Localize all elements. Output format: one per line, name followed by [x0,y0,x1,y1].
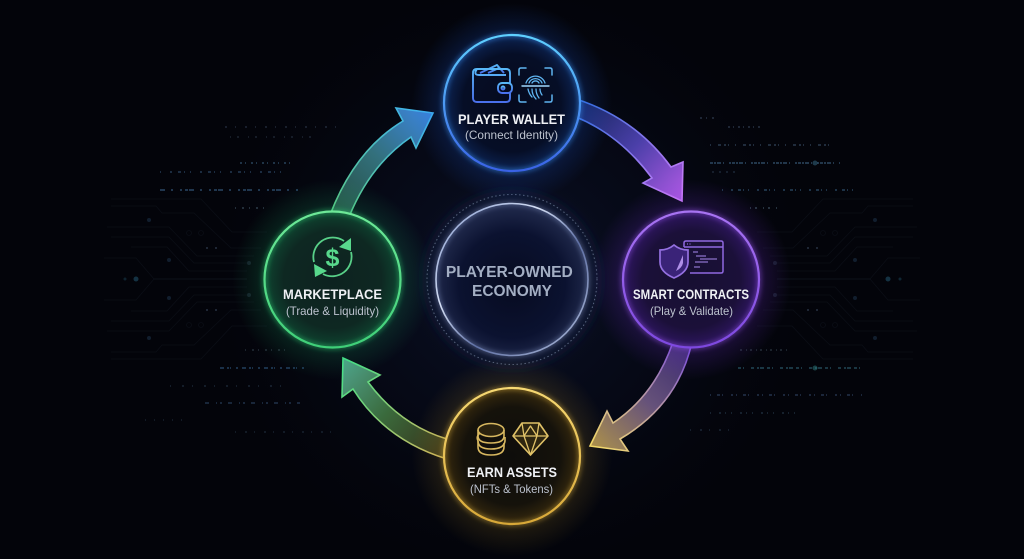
label: marketplace: MARKETPLACE [283,286,382,302]
arrow: wallet to smart contracts [576,99,683,201]
panel: marketplace [232,180,432,380]
label: earn assets: EARN ASSETS [467,464,557,480]
data dot rows right [690,118,902,430]
arrow: marketplace to wallet [330,108,433,217]
panel: earn assets [412,356,612,556]
panel: smart contracts [591,180,791,380]
circuit traces left [104,199,267,359]
label: play and validate: (Play & Validate) [650,304,733,318]
panel: player wallet [412,3,612,203]
label: connect identity: (Connect Identity) [465,128,558,142]
hub title: PLAYER-OWNED [446,264,573,281]
label: nfts and tokens: (NFTs & Tokens) [470,482,553,496]
icon: code window [684,241,723,273]
icon: diamond [513,423,548,455]
icon: coin stack [477,424,505,455]
panel: player-owned economy hub [422,190,602,370]
icon: dollar exchange: $ [326,244,340,272]
arrow: earn assets to marketplace [342,358,447,459]
data dot rows left [124,127,340,432]
icon: fingerprint scanner [519,68,552,102]
label: smart contracts: SMART CONTRACTS [633,286,749,302]
icon: dollar exchange [313,237,352,277]
hub title: ECONOMY [472,283,553,300]
label: trade and liquidity: (Trade & Liquidity) [286,304,379,318]
label: player wallet: PLAYER WALLET [458,111,565,127]
icon: wallet [473,65,512,102]
icon: shield [660,245,688,278]
circuit traces right [757,199,920,359]
arrow: smart contracts to earn assets [590,342,692,451]
